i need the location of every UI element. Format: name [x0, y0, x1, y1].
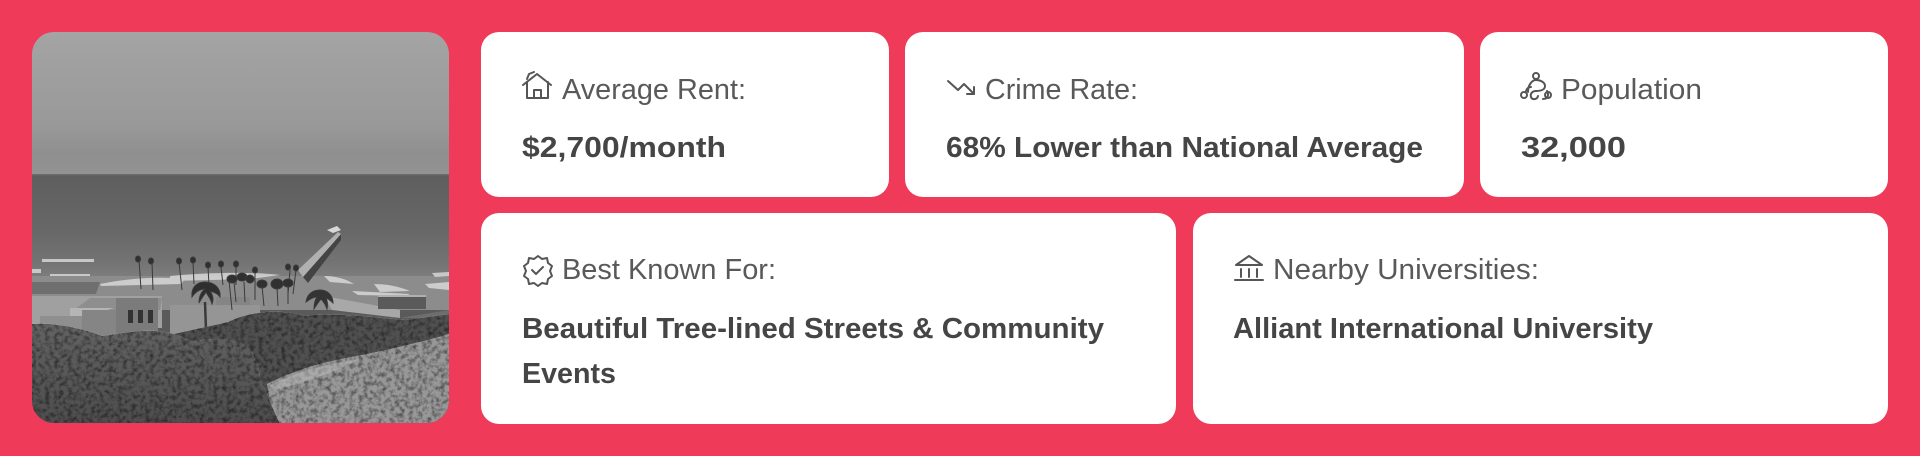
icon: university building	[1235, 256, 1263, 280]
value: best known for: Beautiful Tree-lined Streets & Community	[522, 313, 1104, 345]
label: population: Population	[1561, 74, 1702, 106]
icon: trending down arrow	[948, 81, 974, 94]
mid-ground trees	[174, 312, 449, 394]
panel: population	[1480, 32, 1888, 197]
icon: community	[1521, 73, 1551, 99]
value: crime rate: 68% Lower than National Average	[946, 132, 1423, 164]
pier	[298, 226, 341, 283]
right hillside	[267, 334, 449, 424]
panel: crime rate	[905, 32, 1464, 197]
shore buildings	[32, 282, 449, 337]
panel: average rent	[481, 32, 889, 197]
panel: best known for	[481, 213, 1176, 424]
left dark vegetation	[32, 324, 280, 424]
icon: verified badge	[524, 256, 552, 286]
value: rent: $2,700/month	[522, 132, 726, 164]
value: nearby universities: Alliant International University	[1233, 313, 1653, 345]
value: population: 32,000	[1521, 132, 1626, 164]
panel: nearby universities	[1193, 213, 1888, 424]
value: best known for	[522, 313, 1104, 390]
palm trees	[136, 256, 333, 330]
photo: coastal view with pier	[32, 32, 449, 424]
value: best known for: Events	[522, 358, 616, 390]
label: nearby universities: Nearby Universities:	[1273, 254, 1539, 286]
icon: house	[523, 72, 551, 98]
label: best known for: Best Known For:	[562, 254, 776, 286]
label: crime rate: Crime Rate:	[985, 74, 1138, 106]
label: average rent: Average Rent:	[562, 74, 746, 106]
